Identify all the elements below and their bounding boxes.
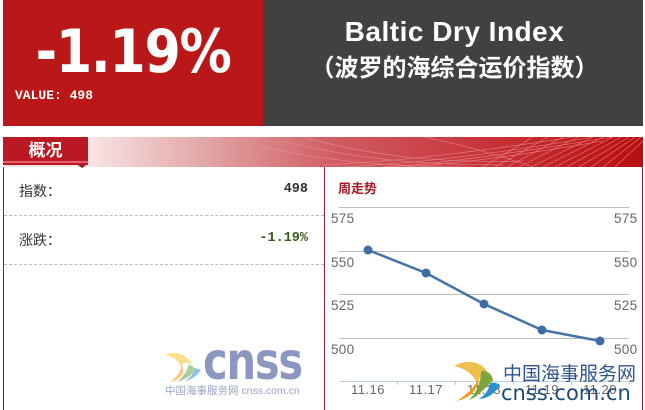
row: change label: 涨跌： [19, 230, 61, 250]
line chart: 11.17 [409, 382, 443, 397]
tab label: 概况 [28, 136, 62, 161]
line chart: 500 [331, 342, 354, 357]
change value: -1.19% [36, 17, 230, 87]
line chart: 575 [331, 211, 354, 226]
panel: title [263, 0, 643, 126]
title chinese: （波罗的海综合运价指数） [310, 48, 598, 83]
line chart: 525 [331, 298, 354, 313]
panel: weekly trend [324, 167, 643, 410]
row: index value: 498 [284, 182, 308, 197]
line chart: 11.18 [467, 382, 501, 397]
tab stripe [3, 161, 88, 163]
line chart: 11.16 [351, 382, 385, 397]
logo: cnss watermark [165, 332, 302, 397]
chart heading: 周走势 [338, 178, 377, 197]
title english: Baltic Dry Index [345, 16, 564, 47]
panel: percent change [3, 0, 263, 126]
logo mark [165, 352, 201, 382]
corner logo chinese name: 中国海事服务网 [503, 359, 636, 386]
index value label: VALUE: 498 [15, 88, 93, 103]
line chart: 525 [614, 298, 637, 313]
line chart: 550 [614, 255, 637, 270]
line chart: 500 [614, 342, 637, 357]
corner logo mark [454, 362, 500, 401]
tab notch [78, 165, 86, 168]
corner logo domain: cnss.com.cn [501, 381, 631, 405]
row: index label: 指数： [19, 181, 61, 201]
logo caption: 中国海事服务网 cnss.com.cn [165, 385, 300, 397]
row: change value: -1.19% [259, 231, 308, 246]
line chart: 11.20 [583, 382, 617, 397]
line chart: 11.19 [525, 382, 559, 397]
section tab [3, 137, 88, 165]
line chart: 575 [614, 211, 637, 226]
panel: overview [3, 167, 324, 410]
logo: cnss corner mark [454, 359, 636, 405]
logo wordmark: cnss [203, 332, 302, 392]
line chart: 550 [331, 255, 354, 270]
section header band [3, 137, 643, 167]
